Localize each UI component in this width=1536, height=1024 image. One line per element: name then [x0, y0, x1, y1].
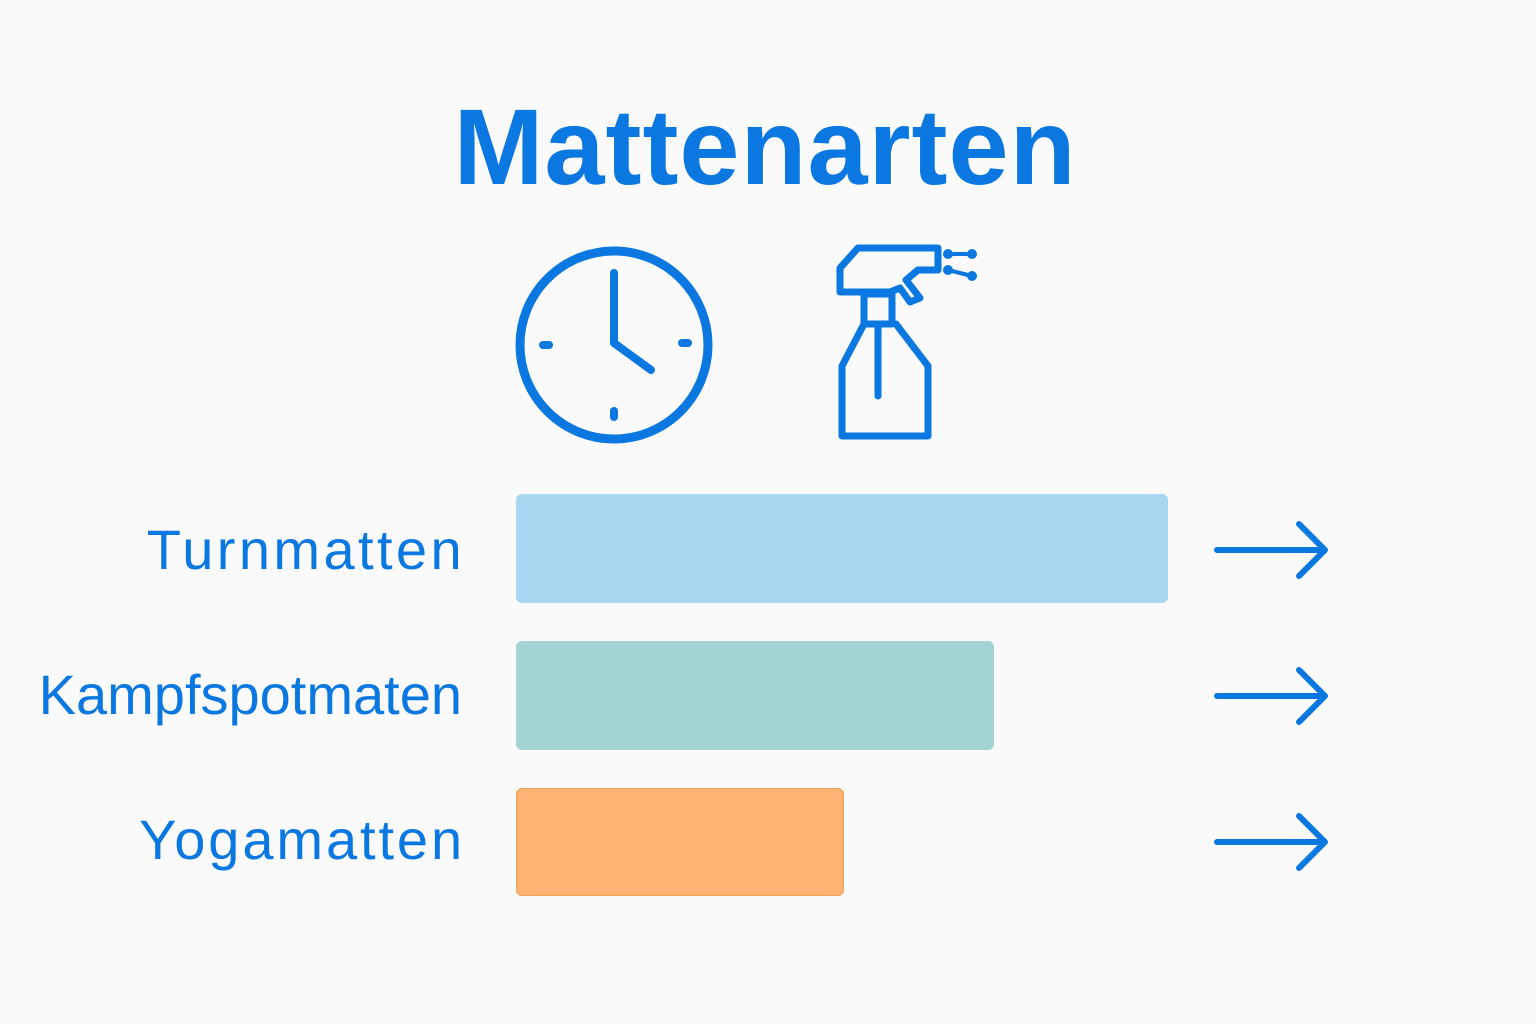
bar: Turnmatten: [516, 494, 1168, 603]
label: Yogamatten: Yogamatten: [139, 808, 465, 871]
icon: clock: [516, 246, 712, 444]
bar: Yogamatten: [516, 788, 844, 896]
arrow 3: [1217, 816, 1325, 868]
arrow 2: [1217, 670, 1325, 722]
icon: spray bottle: [836, 244, 977, 440]
title: Mattenarten: [453, 86, 1077, 207]
label: Turnmatten: Turnmatten: [147, 518, 465, 581]
arrow 1: [1217, 524, 1325, 576]
label: Kampfspotmaten: Kampfspotmaten: [39, 663, 462, 726]
bar: Kampfspotmaten: [516, 641, 994, 750]
arrows: [1214, 521, 1328, 871]
